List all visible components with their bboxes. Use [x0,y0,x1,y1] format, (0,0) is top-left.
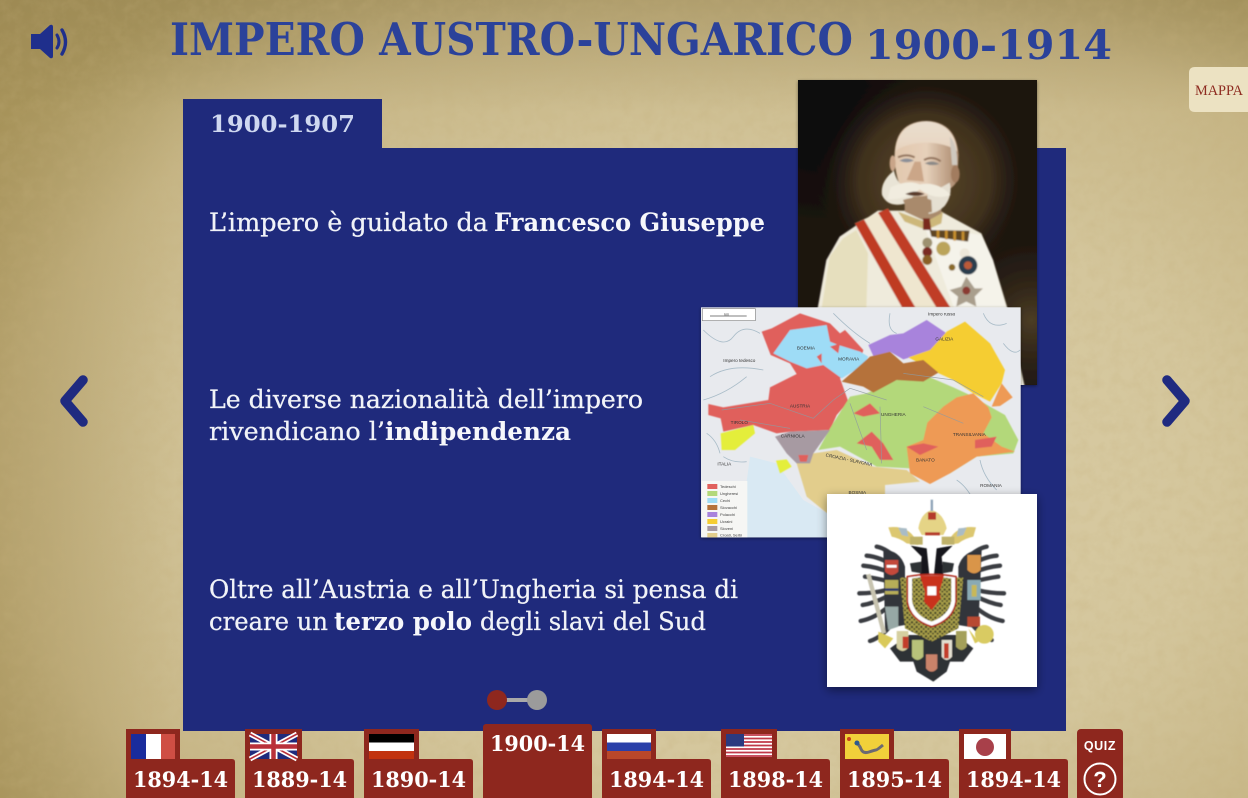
title: IMPERO AUSTRO-UNGARICO [170,13,853,66]
map legend: Slovacchi [720,505,737,510]
image: ethnic map of the empire: TIROLO [731,420,748,425]
eagle body [900,578,963,642]
image: portrait of Francesco Giuseppe [798,80,1037,387]
lower shields [897,631,967,672]
text block: terzo polo: creare un [209,607,328,636]
right side shields [967,555,981,627]
image: ethnic map of the empire: CROAZIA - SLAVONIA [825,452,874,467]
region: light blue [773,325,868,378]
right wing feathers [963,547,1004,640]
sword and orb [868,574,994,648]
pagination dots [487,690,547,710]
flag: France [131,734,175,759]
tab: Gran Bretagna 1889-14: 1889-14 [252,767,347,792]
central shield [907,574,956,627]
region: grey [775,430,830,463]
left side shields [885,560,898,630]
image: ethnic map of the empire: ITALIA [717,461,732,466]
region: lime [721,425,755,450]
button: quiz: ? [1093,767,1107,792]
text block: terzo polo: degli slavi del Sud [480,607,706,636]
title: 1900-1914 [865,22,1112,69]
image: ethnic map of the empire: AUSTRIA [790,403,811,408]
map legend: Croati, Serbi [720,533,742,538]
eagle necks [911,546,953,575]
text block: terzo polo [209,575,738,636]
tab: Austria-Ungheria 1900-14 (active) [483,724,592,798]
whiskers and moustache [882,171,915,205]
sea [747,457,827,537]
text block: Francesco Giuseppe [209,208,765,237]
map legend [702,481,747,538]
eyes and nose [899,158,914,162]
map legend: Sloveni [720,526,733,531]
text block: nazionalità: rivendicano l’ [209,417,385,446]
region: purple [868,320,947,359]
tab: Russia 1894-14: 1894-14 [609,767,704,792]
image: ethnic map of the empire: BOEMIA [797,345,816,350]
map legend: Tedeschi [720,484,736,489]
image: ethnic map of the empire: CARNIOLA [781,434,805,439]
head [895,121,959,197]
region: tan [797,450,920,513]
tab: Austria-Ungheria 1900-14 (active): 1900-14 [490,731,585,756]
flag: Germany [369,734,414,759]
tab label: 1900-1907: 1900-1907 [210,111,355,138]
region: yellow [908,322,1005,402]
left wing feathers [859,547,900,641]
image: imperial coat of arms [827,494,1037,687]
map legend: Ucraini [720,519,733,524]
tab: Cina 1895-14: 1895-14 [847,767,942,792]
coat [798,211,1025,387]
image: ethnic map of the empire: Impero russo [928,311,956,316]
ribbons and medals [923,218,931,230]
tab: Giappone 1894-14 [959,729,1068,798]
text block: nazionalità: indipendenza [385,417,571,446]
enclaves [853,403,893,460]
flag: United States [726,734,772,757]
tab: Giappone 1894-14: 1894-14 [966,767,1061,792]
flag: China (Qing) [845,734,889,759]
image: ethnic map of the empire: MORAVIA [838,357,860,362]
ears [890,155,896,171]
tab: Stati Uniti 1898-14: 1898-14 [728,767,823,792]
tab: Cina 1895-14 [840,729,949,798]
sash [854,208,936,307]
region: brown [842,352,938,393]
button: mappa: MAPPA [1195,83,1244,99]
map scale [702,309,755,321]
tab: Germania 1890-14: 1890-14 [371,767,466,792]
tab: Francia 1894-14 [126,729,235,798]
arrow: previous [65,380,83,422]
crown [910,500,954,545]
map legend: Cechi [720,498,730,503]
image: ethnic map of the empire: UNGHERIA [881,412,907,417]
region: orange [907,393,1015,484]
image: ethnic map of the empire: ROMANIA [980,483,1003,488]
text block: terzo polo: terzo polo [334,607,472,636]
icon: speaker [31,25,66,58]
map legend: Polacchi [720,512,735,517]
mantling [888,527,976,545]
button: quiz [1077,729,1123,798]
text block: nazionalità: Le diverse nazionalità dell’impero [209,385,643,414]
wing roots [883,550,905,628]
flag: Japan [964,734,1006,759]
text block: terzo polo: Oltre all’Austria e all’Ungheria si pensa di [209,575,738,604]
text block: Francesco Giuseppe: Francesco Giuseppe [494,208,765,237]
flag: Russia [607,734,651,759]
image: ethnic map of the empire: BOSNIA [849,490,867,495]
collar [898,212,943,230]
panel background [183,99,1066,731]
image: ethnic map of the empire: GALIZIA [935,337,954,342]
tab: Stati Uniti 1898-14 [721,729,830,798]
button: mappa [1189,67,1248,112]
small heads [910,562,954,573]
tab: Gran Bretagna 1889-14 [245,729,354,798]
tab: Francia 1894-14: 1894-14 [133,767,228,792]
region: red [708,313,863,433]
image: ethnic map of the empire: Impero tedesco [723,358,756,363]
button: quiz: QUIZ [1084,739,1116,753]
image: ethnic map of the empire: TRANSILVANIA [953,432,987,437]
map scale: km [724,312,729,316]
text block: Francesco Giuseppe: L’impero è guidato da [209,208,488,237]
image: ethnic map of the empire: BANATO [916,457,935,462]
text block: nazionalità [209,385,643,446]
panel: 1900-1907 [183,99,1066,731]
region: green [818,377,1018,480]
map legend: Ungheresi [720,491,738,496]
tab: Germania 1890-14 [364,729,473,798]
arrow: next [1167,380,1185,422]
tail and claws [890,635,973,682]
tab: Russia 1894-14 [602,729,711,798]
flag: United Kingdom [250,734,297,759]
image: ethnic map of the empire [701,307,1021,538]
neck and chin [905,193,941,222]
